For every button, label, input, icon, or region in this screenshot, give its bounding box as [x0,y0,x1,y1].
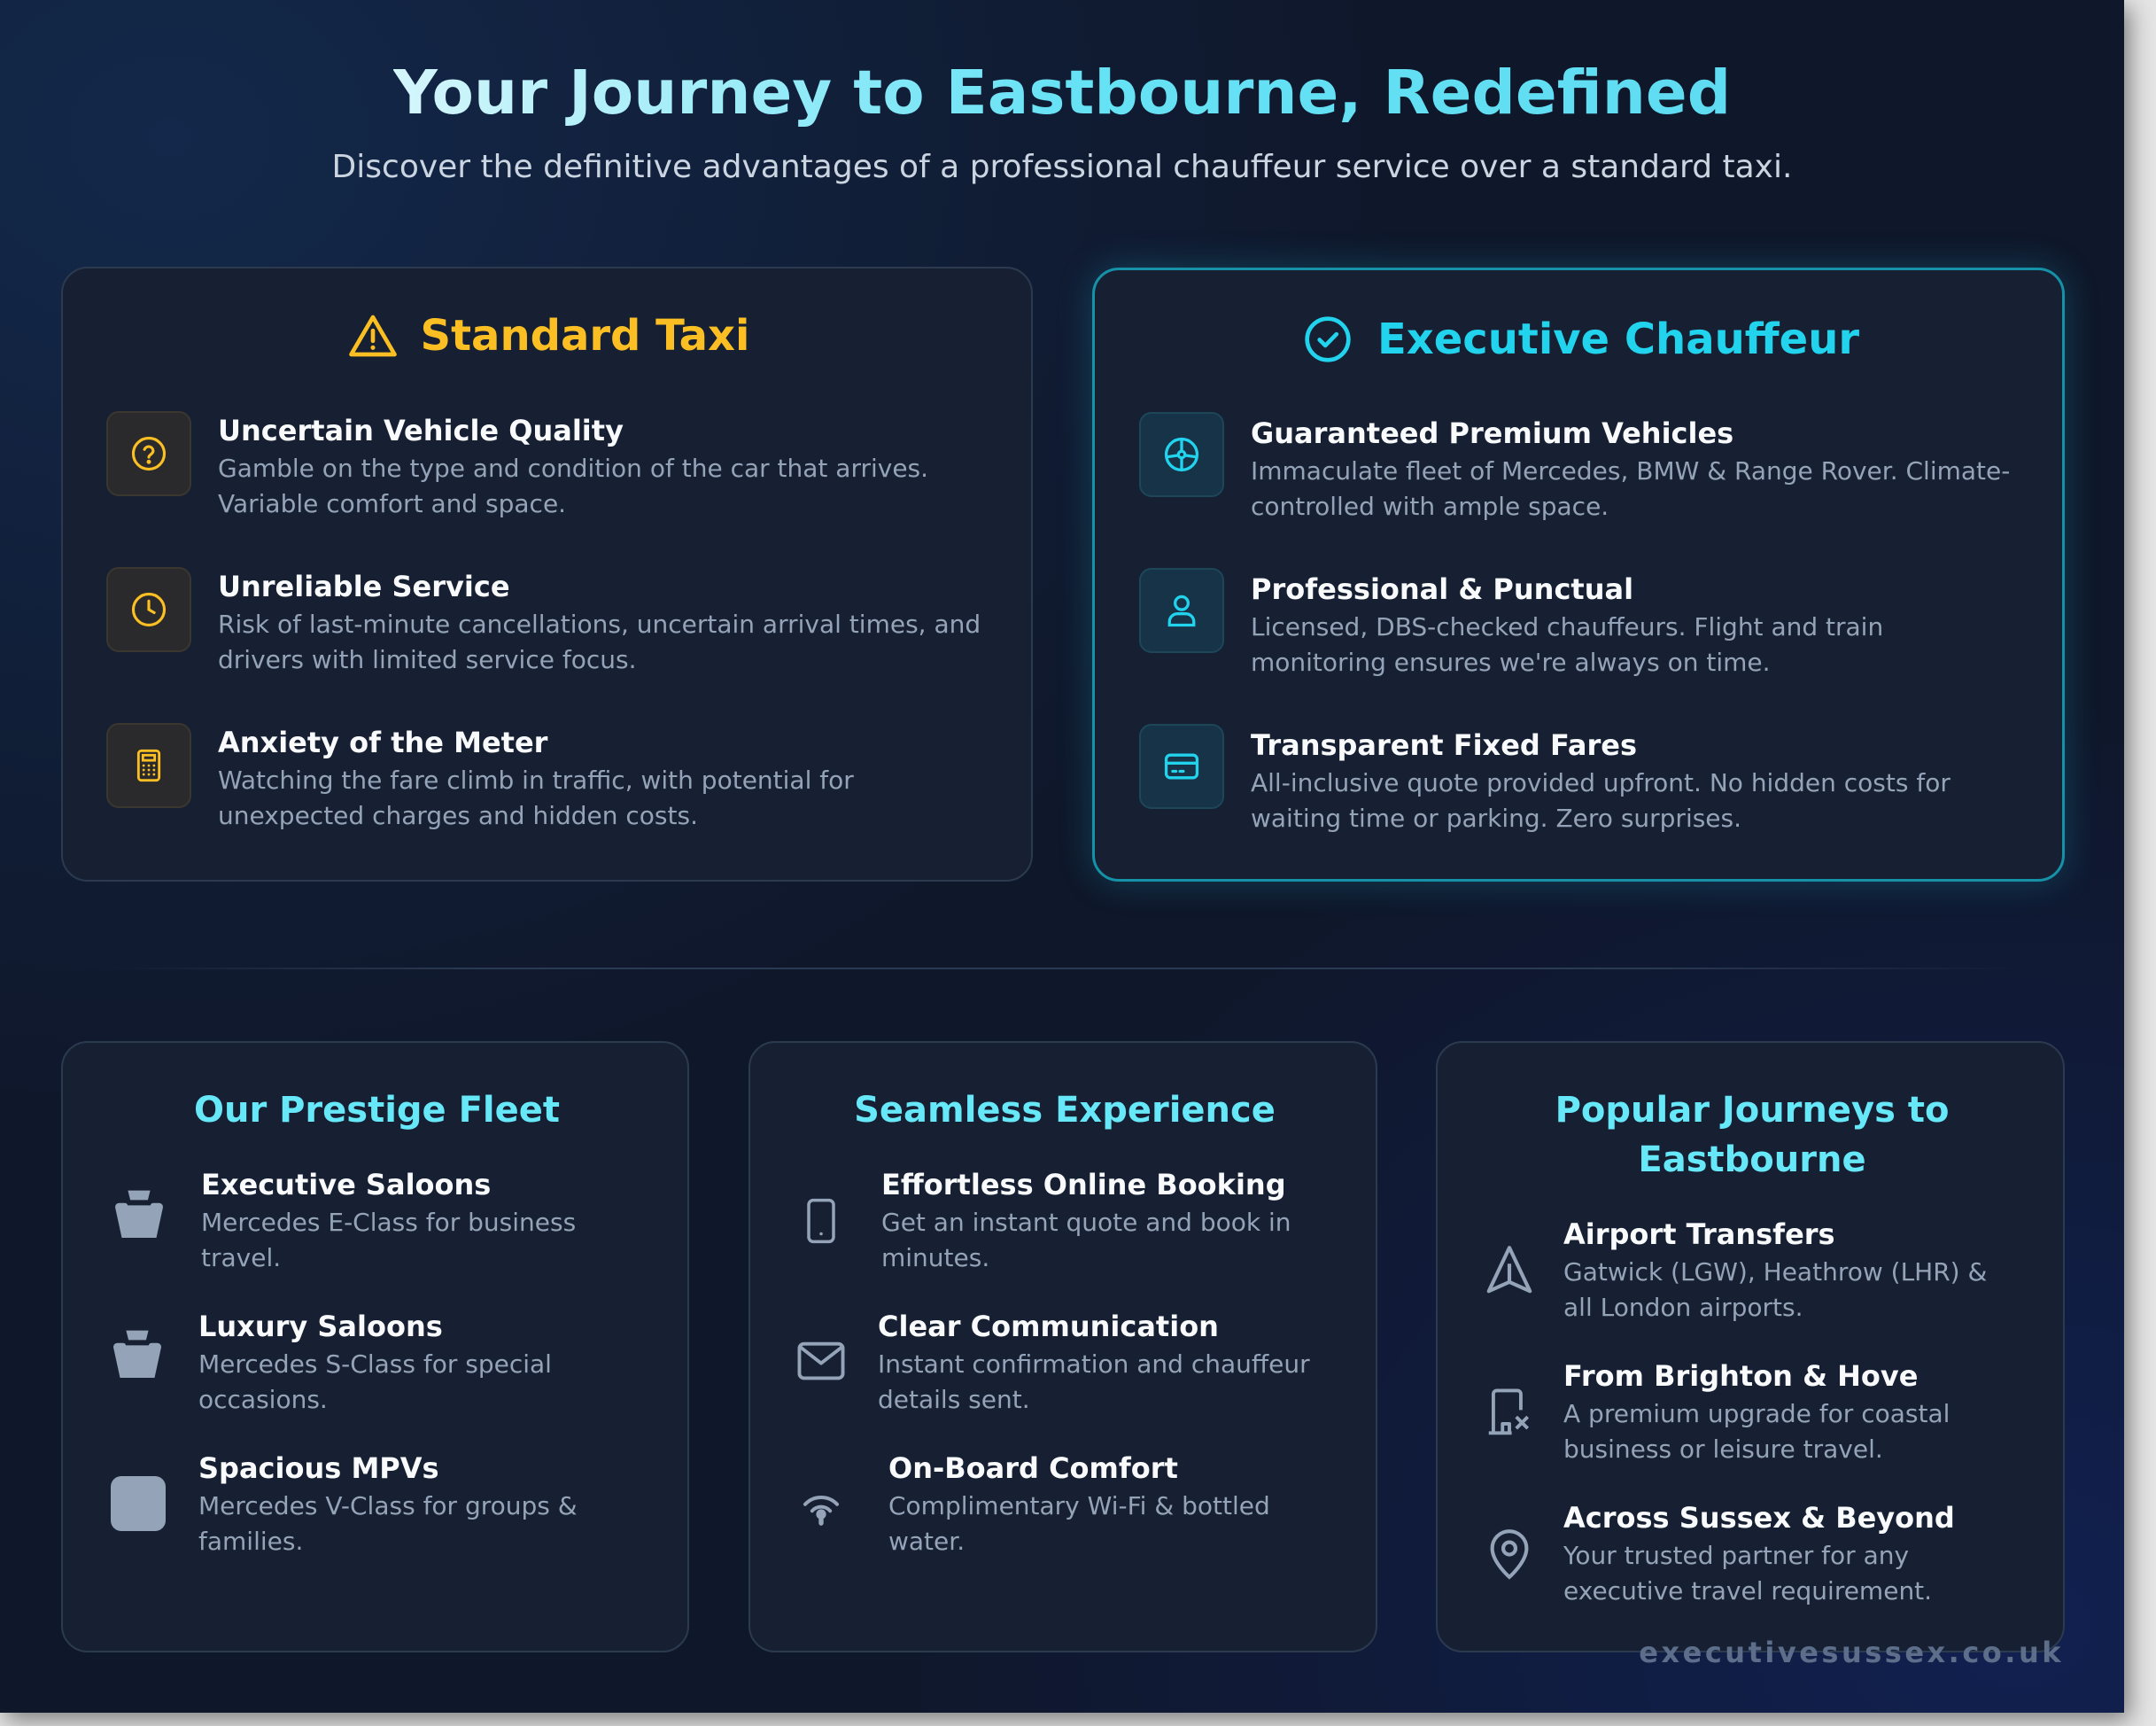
watermark: executivesussex.co.uk [1639,1636,2064,1669]
panel: prestige fleet: Mercedes E-Class for business travel. [201,1208,576,1272]
panel: standard taxi: Anxiety of the Meter [218,726,547,759]
panel: popular journeys [1436,1041,2065,1652]
panel: prestige fleet [61,1041,689,1652]
item: on-board comfort [803,1451,1270,1556]
icon: question [106,411,191,496]
item: brighton & hove [1488,1359,1950,1464]
panel: executive chauffeur: Professional & Punctual [1251,572,1633,606]
panel: prestige fleet: Luxury Saloons [198,1310,443,1343]
heading: popular journeys [1555,1090,1949,1180]
item: unreliable service [106,567,981,674]
panel: popular journeys: Your trusted partner for any executive travel requirement. [1563,1541,1932,1605]
panel: seamless experience: Instant confirmation and chauffeur details sent. [878,1349,1310,1414]
panel: popular journeys: Airport Transfers [1563,1217,1835,1251]
panel: seamless experience: On-Board Comfort [888,1451,1178,1485]
icon: wifi [803,1496,840,1526]
panel: popular journeys: Across Sussex & Beyond [1563,1501,1955,1535]
heading: popular journeys: Eastbourne [1638,1139,1866,1180]
icon: clock [106,567,191,652]
panel: popular journeys: A premium upgrade for coastal business or leisure travel. [1563,1399,1950,1464]
panel: seamless experience: Complimentary Wi-Fi & bottled water. [888,1491,1270,1556]
panel: popular journeys: Gatwick (LGW), Heathrow (LHR) & all London airports. [1563,1257,1987,1322]
item: luxury saloons [113,1310,552,1414]
icon: warning [349,315,397,356]
panel: standard taxi: Uncertain Vehicle Quality [218,414,624,447]
icon: user [1139,568,1224,653]
panel: standard taxi: Watching the fare climb in traffic, with potential for unexpected charges and hidden costs. [218,766,854,830]
panel: standard taxi: Unreliable Service [218,570,510,603]
heading: popular journeys: Popular Journeys to [1555,1090,1949,1131]
panel: seamless experience: Effortless Online Booking [881,1168,1286,1201]
icon: calculator [106,723,191,808]
heading: standard taxi: Standard Taxi [421,311,749,361]
panel: seamless experience [748,1041,1377,1652]
icon: phone [807,1198,835,1244]
panel: standard taxi: Risk of last-minute cancellations, uncertain arrival times, and drivers with limited service focus. [218,610,981,674]
icon: seat [115,1191,163,1238]
item: anxiety of the meter [106,723,854,830]
panel: standard taxi [61,267,1033,882]
panel: executive chauffeur: Immaculate fleet of Mercedes, BMW & Range Rover. Climate-​controlled with ample space. [1251,456,2010,521]
item: uncertain vehicle quality [106,411,928,518]
title: Your Journey to Eastbourne, Redefined [393,58,1731,128]
panel: prestige fleet: Executive Saloons [201,1168,491,1201]
item: professional & punctual [1139,568,1883,677]
icon: envelope [797,1341,845,1380]
panel: executive chauffeur: Transparent Fixed Fares [1251,728,1637,762]
icon: mpv block [111,1476,166,1531]
panel: executive chauffeur: All-inclusive quote provided upfront. No hidden costs for waiting time or parking. Zero surprises. [1251,768,1950,833]
icon: plane [1486,1246,1532,1294]
heading: executive chauffeur: Executive Chauffeur [1377,315,1859,364]
item: across sussex [1490,1501,1955,1605]
item: transparent fixed fares [1139,724,1950,833]
panel: seamless experience: Get an instant quote and book in minutes. [881,1208,1291,1272]
heading: our prestige fleet: Our Prestige Fleet [194,1090,560,1131]
panel: executive chauffeur [1092,268,2065,882]
panel: prestige fleet: Spacious MPVs [198,1451,439,1485]
panel: prestige fleet: Mercedes V-Class for groups & families. [198,1491,578,1556]
panel: seamless experience: Clear Communication [878,1310,1219,1343]
item: spacious mpvs [111,1451,578,1556]
item: guaranteed premium vehicles [1139,412,2010,521]
panel: prestige fleet: Mercedes S-Class for special occasions. [198,1349,552,1414]
subtitle: Discover the definitive advantages of a professional chauffeur service over a standard taxi. [332,149,1792,185]
icon: card [1139,724,1224,809]
panel: executive chauffeur: Licensed, DBS-checked chauffeurs. Flight and train monitoring ensures we're always on time. [1251,612,1883,677]
item: airport transfers [1486,1217,1987,1322]
panel: standard taxi: Gamble on the type and condition of the car that arrives. Variable comfort and space. [218,454,928,518]
icon: steering wheel [1139,412,1224,497]
item: clear communication [797,1310,1310,1414]
heading: seamless experience: Seamless Experience [854,1090,1276,1131]
item: online booking [807,1168,1291,1272]
icon: map pin [1490,1529,1529,1579]
item: executive saloons [115,1168,576,1272]
icon: check circle [1305,316,1351,362]
icon: building [1488,1389,1529,1435]
panel: popular journeys: From Brighton & Hove [1563,1359,1918,1393]
panel: executive chauffeur: Guaranteed Premium Vehicles [1251,416,1733,450]
icon: seat [113,1331,161,1378]
